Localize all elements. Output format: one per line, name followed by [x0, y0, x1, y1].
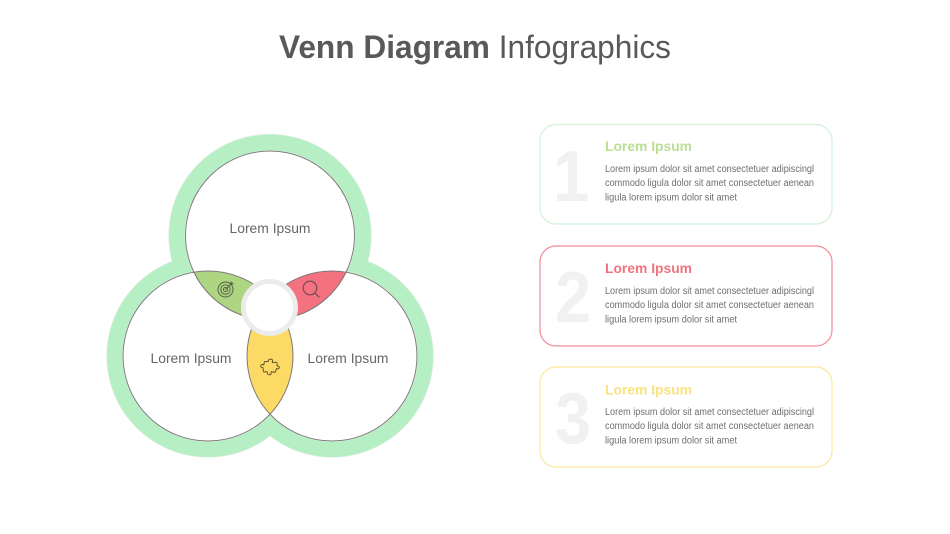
card 3 body text: ligula lorem ipsum dolor sit amet [605, 436, 737, 446]
number 1: 1 [553, 137, 589, 217]
panel: card 1 [540, 124, 832, 224]
white circle bases [122, 150, 418, 442]
center circle [244, 282, 296, 334]
card 2 body text: Lorem ipsum dolor sit amet consectetuer adipiscingl [605, 286, 814, 297]
icon: puzzle piece [261, 359, 279, 375]
circle outlines [123, 151, 417, 441]
number 3: 3 [555, 379, 591, 459]
number 2: 2 [555, 258, 591, 338]
card 2 body text [605, 286, 814, 326]
card 1 body text: Lorem ipsum dolor sit amet consectetuer adipiscingl [605, 164, 814, 175]
card 1 body text: ligula lorem ipsum dolor sit amet [605, 192, 737, 204]
overlap: red [286, 272, 346, 315]
label: left circle: Lorem Ipsum [150, 350, 232, 366]
icon: target [218, 282, 234, 297]
card 3 body text: Lorem ipsum dolor sit amet consectetuer adipiscingl [605, 407, 814, 418]
title: Venn Diagram Infographics [279, 29, 671, 65]
panel: card 3 [540, 367, 832, 467]
card 3 heading: Lorem Ipsum [605, 382, 692, 398]
outer green halo [107, 134, 433, 457]
card 3 body text [605, 407, 814, 446]
halo soft edge [106, 134, 434, 458]
card 2 body text: commodo ligula dolor sit amet consectetuer aenean [605, 300, 814, 311]
label: top circle: Lorem Ipsum [230, 220, 310, 236]
card 3 body text: commodo ligula dolor sit amet consectetuer aenean [605, 421, 814, 432]
overlap: green [194, 272, 253, 315]
icon: magnifier [303, 281, 320, 298]
panel: card 2 [540, 246, 832, 346]
card 2 body text: ligula lorem ipsum dolor sit amet [605, 314, 737, 326]
card 2 heading: Lorem Ipsum [605, 261, 692, 276]
overlap: yellow [248, 329, 292, 414]
venn diagram [106, 134, 434, 458]
card 1 body text [605, 164, 814, 204]
card 1 body text: commodo ligula dolor sit amet consectetuer aenean [605, 178, 814, 189]
card 1 heading: Lorem Ipsum [605, 139, 692, 154]
label: right circle: Lorem Ipsum [308, 350, 388, 366]
